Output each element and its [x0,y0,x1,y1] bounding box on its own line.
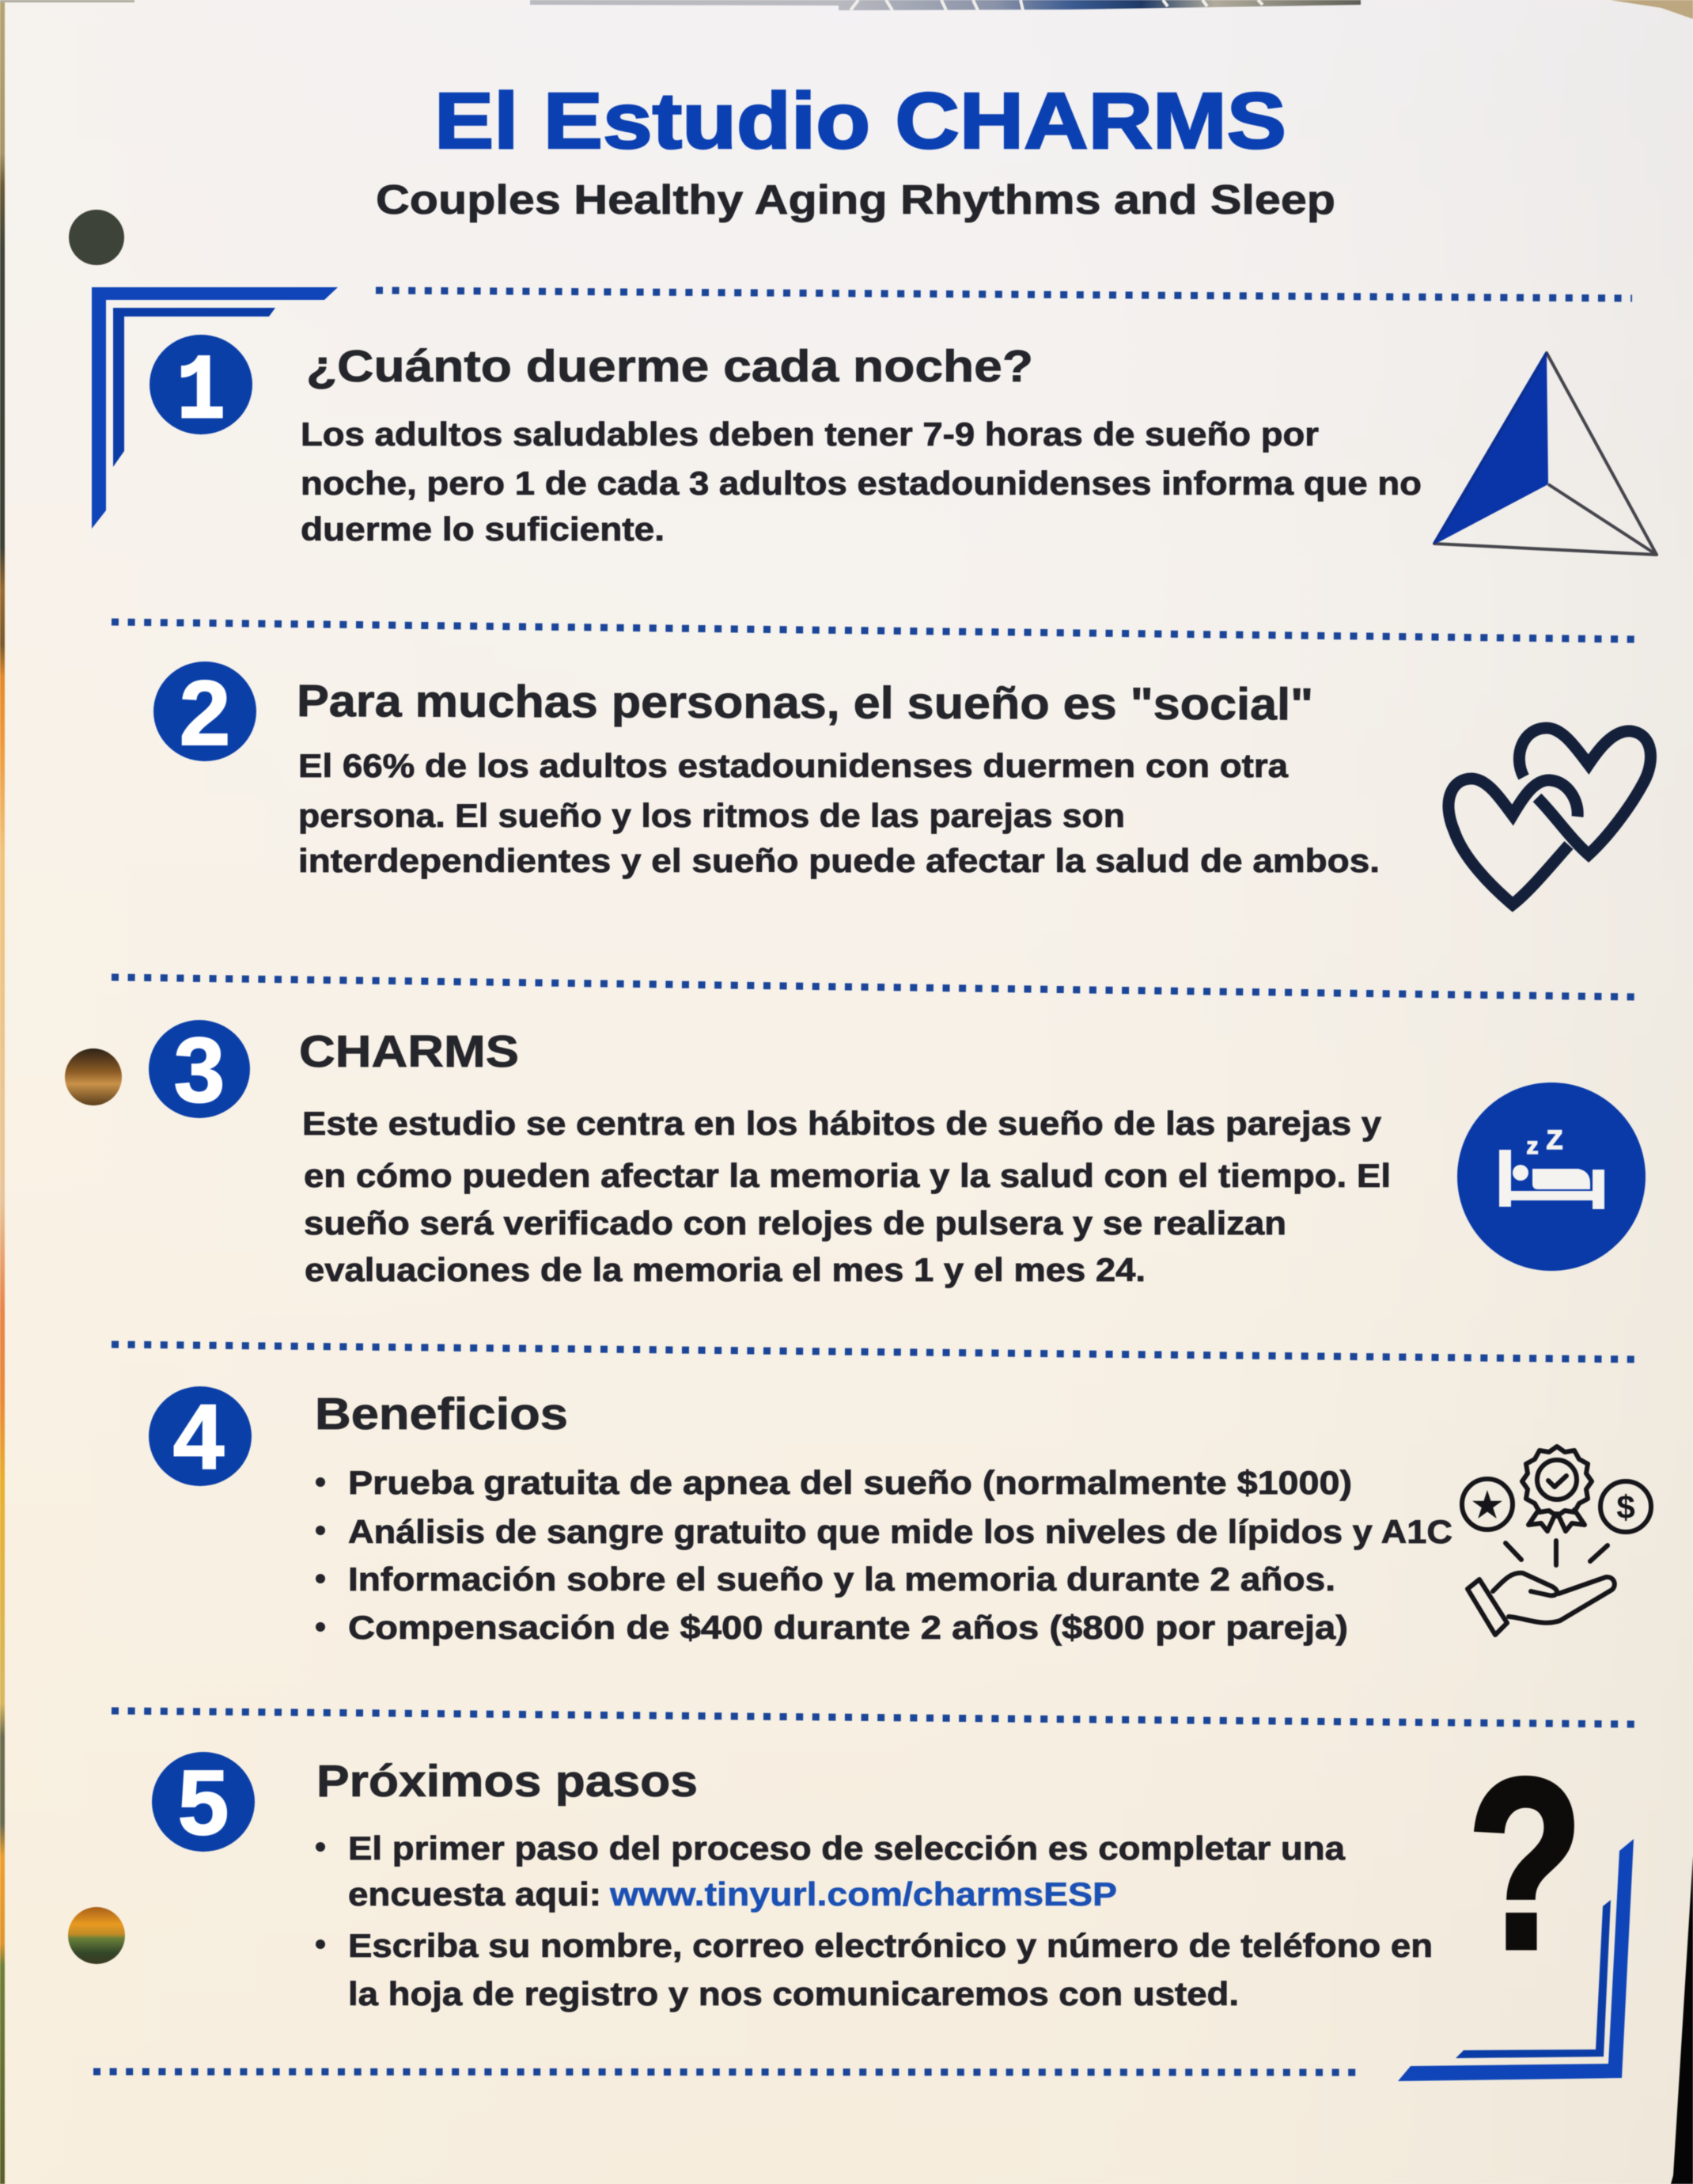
body 3: sueño será verificado con relojes de pulsera y se realizan [304,1204,1286,1242]
body 3 [302,1105,1391,1288]
section 5 [152,1730,1583,2012]
dotted divider 2 [112,622,1640,639]
body 2: El 66% de los adultos estadounidenses duermen con otra [298,747,1289,784]
icon: question mark: ? [1468,1730,1583,2000]
benefits list [316,1464,1452,1646]
dotted divider 4 [112,1344,1643,1359]
number badge 1 [150,335,252,445]
icon: sleeping in bed: Z [1547,1125,1562,1155]
number badge 4 [149,1386,252,1488]
title: El Estudio CHARMS [434,77,1286,165]
next steps list: Escriba su nombre, correo electrónico y número de teléfono en [348,1927,1433,1964]
body 3: evaluaciones de la memoria el mes 1 y el mes 24. [305,1251,1146,1288]
next steps list: la hoja de registro y nos comunicaremos con usted. [348,1975,1239,2012]
number badge 2: 2 [180,662,230,764]
next steps list: www.tinyurl.com/charmsESP [609,1875,1117,1913]
number badge 5: 5 [178,1751,229,1854]
next steps list: El primer paso del proceso de selección es completar una [348,1829,1346,1867]
body 2: persona. El sueño y los ritmos de las parejas son [298,797,1125,834]
icon: sleeping in bed [1457,1083,1646,1271]
icon: hand with awards: $ [1616,1488,1635,1526]
heading 5: Próximos pasos [316,1756,698,1807]
number badge 3 [149,1018,250,1121]
binder hole bottom [68,1907,125,1964]
icon: interlocked hearts [1449,728,1650,904]
dotted divider 1 [376,290,1632,298]
heading 2: Para muchas personas, el sueño es "social" [297,676,1313,730]
heading 4: Beneficios [315,1389,568,1439]
dotted divider 3 [112,977,1642,997]
section 1 [150,335,1657,555]
body 1: noche, pero 1 de cada 3 adultos estadounidenses informa que no [301,464,1422,502]
body 1: duerme lo suficiente. [301,510,665,548]
body 2: interdependientes y el sueño puede afectar la salud de ambos. [298,842,1380,879]
icon: hand with awards [1462,1447,1651,1635]
heading 3: CHARMS [299,1026,519,1077]
number badge 5 [152,1751,255,1854]
subtitle: Couples Healthy Aging Rhythms and Sleep [376,177,1335,223]
body 3: en cómo pueden afectar la memoria y la salud con el tiempo. El [304,1157,1391,1194]
icon: sleeping in bed: z [1527,1133,1538,1159]
binder hole middle [65,1048,122,1105]
dotted divider 5 [112,1711,1638,1724]
corner bracket bottom right [1398,1839,1634,2081]
body 1: Los adultos saludables deben tener 7-9 horas de sueño por [301,415,1319,453]
benefits list: Compensación de $400 durante 2 años ($800 por pareja) [348,1609,1348,1646]
section 4 [149,1386,1651,1646]
benefits list: Análisis de sangre gratuito que mide los niveles de lípidos y A1C [348,1513,1452,1550]
next steps list [316,1829,1433,2012]
section 3 [149,1018,1646,1288]
section 2 [153,662,1650,904]
icon: pyramid [1434,353,1657,555]
number badge 4: 4 [173,1386,224,1488]
number badge 2 [153,662,256,764]
number badge 1: 1 [176,340,225,445]
benefits list: Prueba gratuita de apnea del sueño (normalmente $1000) [348,1464,1352,1501]
body 2 [298,747,1380,879]
heading 1: ¿Cuánto duerme cada noche? [306,341,1033,392]
icon: hand with awards: ★ [1471,1486,1503,1525]
corner bracket top left [92,287,338,529]
binder hole top [69,210,124,265]
body 1 [301,415,1422,548]
next steps list: encuesta aqui: [348,1875,601,1913]
benefits list: Información sobre el sueño y la memoria durante 2 años. [348,1560,1335,1598]
body 3: Este estudio se centra en los hábitos de sueño de las parejas y [302,1105,1382,1142]
number badge 3: 3 [174,1018,225,1121]
